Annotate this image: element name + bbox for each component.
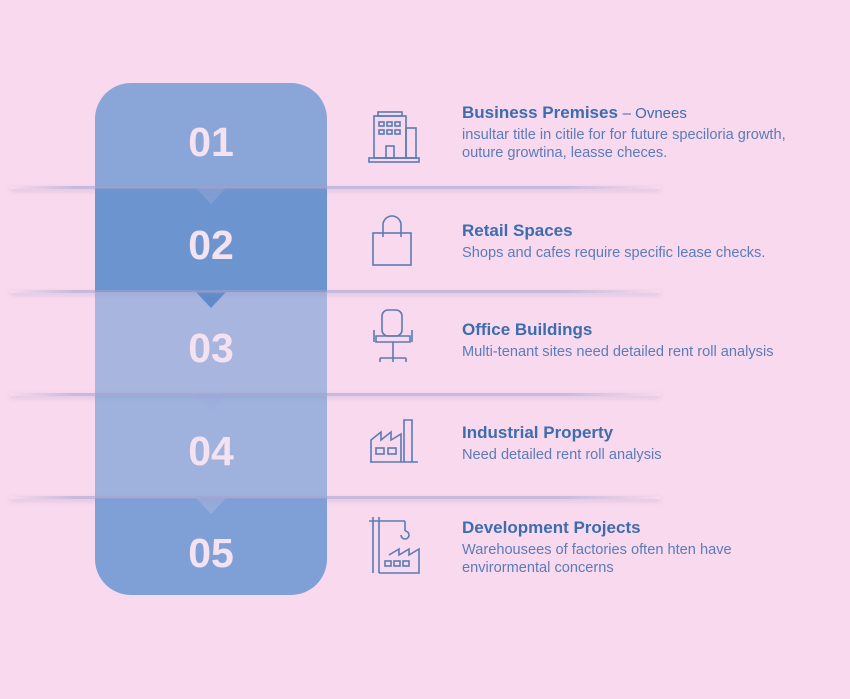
- number 03: 03: [188, 325, 234, 371]
- desc 5: Warehousees of factories often hten have: [462, 542, 732, 558]
- title 2: Retail Spaces: [462, 221, 573, 240]
- numbered column: [95, 83, 327, 595]
- title 1: Business Premises – Ovnees: [462, 103, 687, 122]
- icon: factory: [370, 419, 418, 463]
- desc 4: Need detailed rent roll analysis: [462, 447, 662, 463]
- title 3: Office Buildings: [462, 320, 592, 339]
- icon: crane factory: [369, 517, 420, 574]
- title 5: Development Projects: [462, 518, 641, 537]
- icon: building: [368, 111, 420, 163]
- number 05: 05: [188, 530, 234, 576]
- icon: bag: [372, 215, 412, 266]
- desc 1: outure growtina, leasse checes.: [462, 145, 667, 161]
- title 4: Industrial Property: [462, 423, 613, 442]
- desc 3: Multi-tenant sites need detailed rent roll analysis: [462, 344, 774, 360]
- desc 2: Shops and cafes require specific lease checks.: [462, 245, 765, 261]
- number 04: 04: [188, 428, 234, 474]
- icon: chair: [373, 309, 413, 362]
- number 01: 01: [188, 119, 234, 165]
- desc 5: [462, 542, 732, 576]
- desc 1: [462, 127, 786, 161]
- desc 1: insultar title in citile for for future speciloria growth,: [462, 127, 786, 143]
- desc 5: envirormental concerns: [462, 560, 614, 576]
- number 02: 02: [188, 222, 234, 268]
